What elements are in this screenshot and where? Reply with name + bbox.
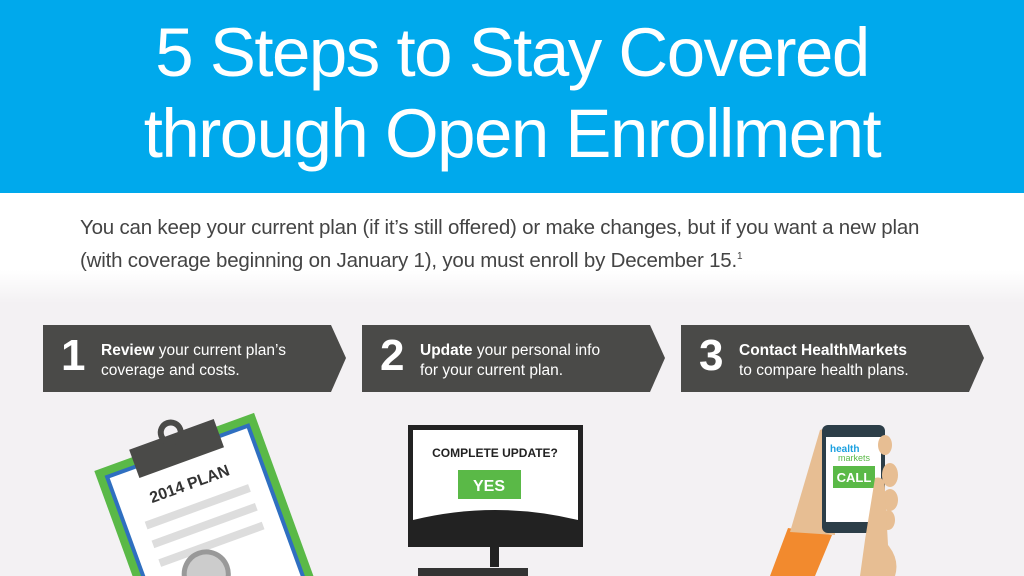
intro text: [80, 216, 919, 272]
title: through Open Enrollment: [144, 95, 880, 172]
icon: monitor: YES: [473, 478, 505, 495]
icon: phone in hand: [770, 425, 898, 576]
icon: clipboard: 2014 PLAN: [148, 462, 232, 507]
step 2 banner: Update your personal info: [420, 342, 600, 359]
icon: phone in hand: health: [830, 444, 859, 455]
intro text: (with coverage beginning on January 1), you must enroll by December 15.1: [80, 249, 742, 272]
icon: phone in hand: markets: [838, 453, 871, 463]
step 2 banner: 2: [380, 331, 404, 380]
icon: monitor: [408, 425, 583, 576]
step 3 banner: 3: [699, 331, 723, 380]
title: 5 Steps to Stay Covered: [155, 14, 869, 91]
step 3 banner: to compare health plans.: [739, 362, 909, 379]
title: [144, 14, 882, 172]
step 1 banner: 1: [61, 331, 85, 380]
icon: phone in hand: CALL: [837, 470, 871, 485]
step 3 banner: [681, 325, 984, 392]
step 2 banner: [362, 325, 665, 392]
header band: [0, 0, 1024, 193]
icon: clipboard: [87, 394, 329, 576]
step 1 banner: [43, 325, 346, 392]
step 3 banner: Contact HealthMarkets: [739, 342, 907, 359]
icon: monitor: COMPLETE UPDATE?: [432, 446, 558, 460]
intro text: You can keep your current plan (if it’s still offered) or make changes, but if you want a new plan: [80, 216, 919, 239]
step 2 banner: for your current plan.: [420, 362, 563, 379]
step 1 banner: Review your current plan’s: [101, 342, 286, 359]
step 1 banner: coverage and costs.: [101, 362, 240, 379]
